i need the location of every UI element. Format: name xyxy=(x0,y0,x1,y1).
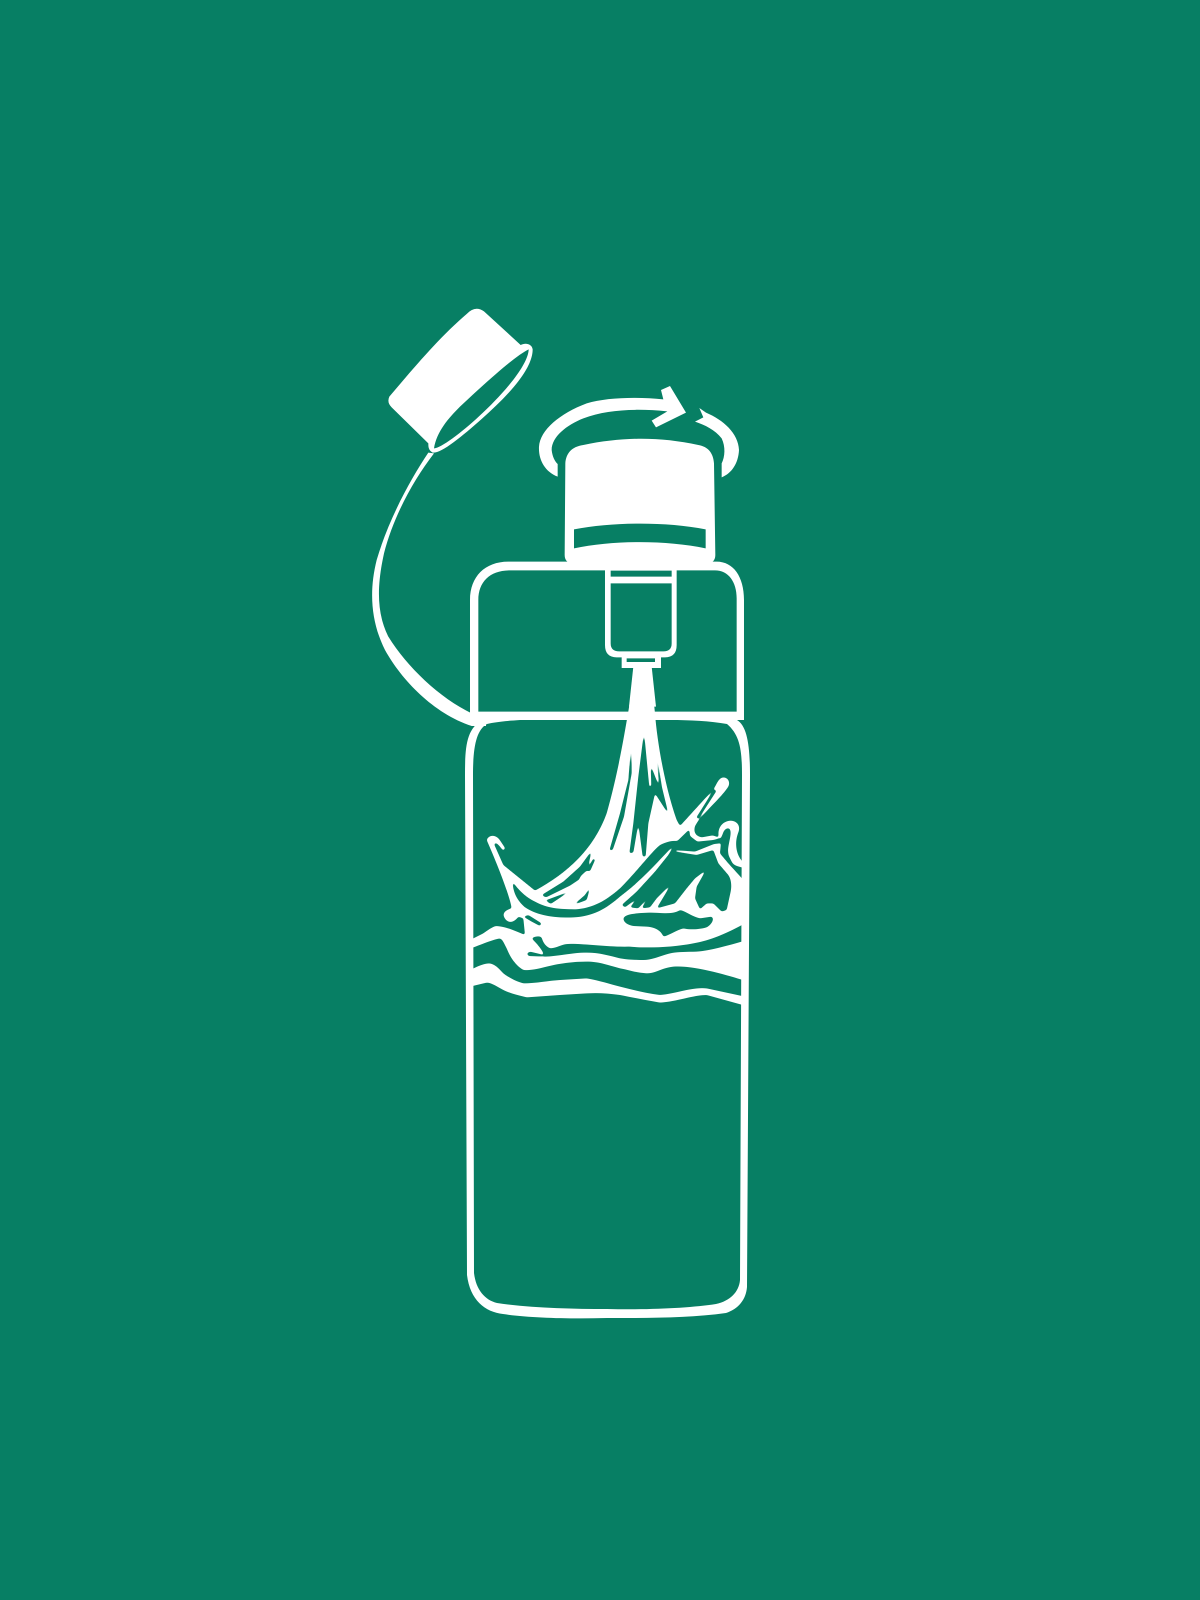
rotation arrow xyxy=(539,386,739,477)
lower wave xyxy=(470,963,745,1006)
lower bottle body xyxy=(465,715,750,1318)
upper pocket by hook xyxy=(675,829,723,852)
crescent under crest xyxy=(513,841,678,918)
central stream gap xyxy=(629,732,676,857)
pocket under crest xyxy=(622,842,731,912)
spray neck xyxy=(629,667,656,707)
splash mass with upper wave xyxy=(470,690,745,981)
island in foam xyxy=(623,910,713,937)
bottle top assembly xyxy=(372,309,744,726)
notch right of foam xyxy=(720,835,745,882)
water splash and waves xyxy=(460,680,760,1010)
upper bottle section xyxy=(470,562,744,720)
wedge in left foam xyxy=(523,915,542,926)
tether strap xyxy=(372,453,486,726)
screw cap xyxy=(565,439,715,565)
nozzle xyxy=(622,657,661,668)
wave trough xyxy=(527,923,745,960)
open lid xyxy=(388,309,533,453)
inner stem xyxy=(605,565,677,657)
slit in crest tip xyxy=(696,789,717,819)
stream slits xyxy=(609,737,632,851)
